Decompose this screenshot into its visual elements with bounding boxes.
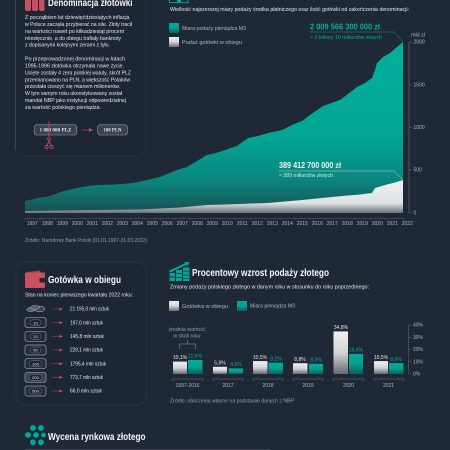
row: 100 PLN: 100 [32, 361, 40, 366]
bars: 2020: 34,8% [334, 325, 349, 331]
bars: 2020: 2020 [343, 383, 354, 389]
icon: coin stacks [25, 0, 44, 11]
arrow: old to new currency [82, 128, 93, 132]
axis: years: 2003 [117, 221, 128, 227]
bars: 2019: 2019 [302, 383, 314, 389]
banknote: 100 PLN: 100 PLN [104, 129, 122, 134]
text block: denomination history: przemianowano na PLN, a większość Polaków [25, 77, 130, 83]
bars: 2018 [253, 355, 283, 389]
area: M3 [25, 42, 403, 213]
bars: 2017: 4,6% [230, 362, 242, 368]
row: 20 PLN [25, 331, 104, 341]
row: 200 PLN: 200 [32, 375, 40, 380]
axis: years: 2018 [342, 221, 353, 227]
axis: years: 2015 [297, 221, 308, 227]
text block: denomination history: Ucięte zostały 4 zera polskiej waluty, skrót PLZ [25, 70, 132, 76]
bars: 2021: 8,9% [390, 357, 402, 363]
axis: years: 2020 [372, 221, 383, 227]
axis: years: 1997 [27, 221, 38, 227]
row: 500 PLN: 66,0 mln sztuk [70, 389, 102, 395]
axis: years: 2013 [267, 221, 278, 227]
axis: years: 2002 [102, 221, 113, 227]
axis: years: 2017 [327, 221, 338, 227]
bars: 2021 [374, 355, 404, 389]
bars: 2020 [334, 325, 364, 389]
clipped body text strip [25, 449, 270, 450]
legend: money supply chart: Podaż gotówki w obiegu [182, 40, 242, 46]
bars: 2017: 5,9% [214, 360, 226, 366]
axis: value axis: 1000 [414, 125, 425, 131]
axis: percent: 40% [413, 323, 424, 329]
axis: years: 2021 [387, 221, 398, 227]
bars: 1997-2016: 1997-2016 [176, 383, 200, 389]
bars: 2018: 9,2% [270, 356, 282, 362]
legend: growth chart: Gotówka w obiegu [182, 304, 228, 310]
banknote: 1 000 000 PLZ [34, 125, 77, 135]
text block: denomination history: z dopisanymi kolejnymi zerami z tyłu. [25, 42, 110, 48]
bars: 2021: 2021 [383, 383, 394, 389]
axis: value axis: 1500 [414, 83, 425, 89]
axis: value axis: 0 [414, 211, 416, 217]
axis: percent: 20% [413, 347, 424, 353]
bars: 1997-2016: 10,1% [173, 355, 188, 361]
text block: denomination history: miesięcznie, a do obiegu trafiały banknoty [25, 36, 121, 42]
row: 10 PLN [25, 318, 103, 328]
axis: years: 2001 [87, 221, 98, 227]
axis: value axis: 500 [414, 168, 422, 174]
axis: years: 2004 [132, 221, 143, 227]
axis: value axis [409, 32, 426, 217]
callout: cash value [279, 161, 403, 180]
row: 20 PLN: 20 [33, 334, 38, 339]
axis: percent: 0% [413, 372, 421, 378]
annotation: average value: w skali roku [174, 333, 201, 339]
callout: M3 value: ≈ 2 biliony 10 miliardów złotych [310, 35, 382, 41]
axis: percent [408, 323, 424, 378]
banknote: 100 PLN [98, 125, 127, 135]
axis: years: 2008 [192, 221, 203, 227]
axis: years: 2019 [357, 221, 368, 227]
axis: years: 2014 [282, 221, 293, 227]
bars: 2017 [213, 360, 243, 389]
axis: years: 2005 [147, 221, 158, 227]
row: 50 PLN: 229,1 mln sztuk [70, 348, 103, 354]
panel: denomination [16, 0, 145, 156]
text block: denomination history: 1995-1996 złotówka otrzymała nowe życie. [25, 63, 124, 69]
row: 500 PLN: 500 [32, 389, 40, 394]
row: 10 PLN: 197,0 mln sztuk [70, 320, 103, 326]
row: 500 PLN [25, 386, 102, 396]
bars: 2019: 8,3% [310, 358, 322, 364]
axis: years: 2009 [207, 221, 218, 227]
source: money supply chart: Źródło: Narodowy Bank Polski (01.01.1997-31.03.2022) [25, 237, 147, 244]
legend: money supply chart [169, 23, 246, 47]
text block: denomination history: Z początkiem lat dziewięćdziesiątych inflacja [25, 15, 130, 21]
axis: percent: 30% [413, 335, 424, 341]
callout: M3 value: 2 009 566 300 000 zł [310, 22, 381, 32]
axis: years: 2011 [237, 221, 248, 227]
axis: years: 1998 [42, 221, 53, 227]
bar chart: growth [172, 325, 404, 389]
banknote: 1 000 000 PLZ: 1 000 000 PLZ [40, 129, 72, 134]
axis: years: 2010 [222, 221, 233, 227]
row: 50 PLN [25, 345, 103, 355]
text block: denomination history [24, 15, 133, 111]
area chart: M3 and cash [25, 22, 403, 213]
icon: chart header [170, 0, 188, 3]
subtitle: money supply chart: Wielkość najszerszej miary podaży środka płatniczego oraz ilość gotówki od zakończenia denominacji: [170, 7, 409, 13]
row: 50 PLN: 50 [33, 348, 38, 353]
axis: years: 2000 [72, 221, 83, 227]
bars: 2017: 2017 [222, 383, 234, 389]
panel: cash in circulation [16, 262, 146, 405]
heading: market valuation: Wycena rynkowa złotego [48, 432, 146, 443]
bars: 2018: 10,5% [253, 355, 268, 361]
axis: years: 2006 [162, 221, 173, 227]
text block: denomination history: przestała cieszyć się mianem milionerów. [25, 84, 120, 90]
text block: denomination history: za wartość polskiego pieniądza. [25, 105, 101, 111]
bars: 1997-2016 [172, 354, 202, 389]
legend: money supply chart: Miara podaży pieniądza M3 [182, 26, 246, 32]
axis: value axis: 2000 [414, 40, 425, 46]
heading: cash in circulation: Gotówka w obiegu [48, 275, 121, 286]
source: growth chart: Źródło: obliczenia własne na podstawie danych z NBP [170, 397, 295, 404]
bars: 1997-2016: 11,6% [188, 354, 202, 360]
text block: denomination history: W tym samym roku ukonstytuowany został [25, 91, 123, 97]
bars: 2019 [293, 357, 323, 389]
bars: 2019: 8,8% [294, 357, 306, 363]
text block: denomination history: mandat NBP jako instytucji odpowiedzialnej [25, 98, 126, 104]
row: 100 PLN [25, 359, 106, 369]
row: 10 PLN: 10 [33, 320, 38, 325]
icon: wallet [25, 270, 45, 288]
axis: years: 1999 [57, 221, 68, 227]
annotation: average value: średnia wartość [168, 327, 206, 333]
icon: hexagon cluster [25, 425, 46, 445]
callout: cash value: 389 412 700 000 zł [279, 161, 342, 170]
bars: 2018: 2018 [262, 383, 274, 389]
annotation: average value [168, 327, 206, 349]
callout: cash value: ≈ 389 miliardów złotych [279, 173, 333, 179]
heading: growth: Procentowy wzrost podaży złotego [192, 268, 329, 279]
legend: growth chart [169, 301, 295, 311]
axis: percent: 10% [413, 359, 424, 365]
row: 100 PLN: 1795,4 mln sztuk [70, 361, 106, 367]
row: 200 PLN [25, 372, 103, 382]
axis: years: 2016 [312, 221, 323, 227]
icon: growth bars [169, 262, 190, 281]
text block: denomination history: w Polsce zaczęła przybierać na sile. Złoty tracił [24, 22, 133, 28]
row: 20 PLN: 145,8 mln sztuk [70, 334, 104, 340]
bars: 2021: 10,5% [374, 355, 389, 361]
axis: value axis: mld zł [411, 32, 426, 38]
row: 200 PLN: 773,7 mln sztuk [70, 375, 103, 381]
callout: M3 value [310, 22, 403, 42]
text block: denomination history: Po przeprowadzonej denominacji w latach [25, 56, 125, 62]
axis: years: 2022 [402, 221, 413, 227]
bars: 2020: 16,4% [349, 348, 364, 354]
subtitle: growth: Zmiany podaży polskiego złotego w danym roku w stosunku do roku poprzedniego: [170, 284, 369, 290]
subtitle: cash in circulation: Stan na koniec pierwszego kwartału 2022 roku: [25, 292, 133, 298]
icon: scissors [45, 121, 53, 149]
axis: years: 2012 [252, 221, 263, 227]
axis: years [25, 219, 413, 227]
axis: years: 2007 [177, 221, 188, 227]
row: coins [26, 306, 109, 313]
text block: denomination history: na wartości nawet po kilkadziesiąt procent [25, 29, 124, 35]
row: coins: 21 195,0 mln sztuk [70, 307, 109, 313]
legend: growth chart: Miara pieniądza M3 [250, 304, 295, 310]
area: cash [25, 180, 403, 213]
